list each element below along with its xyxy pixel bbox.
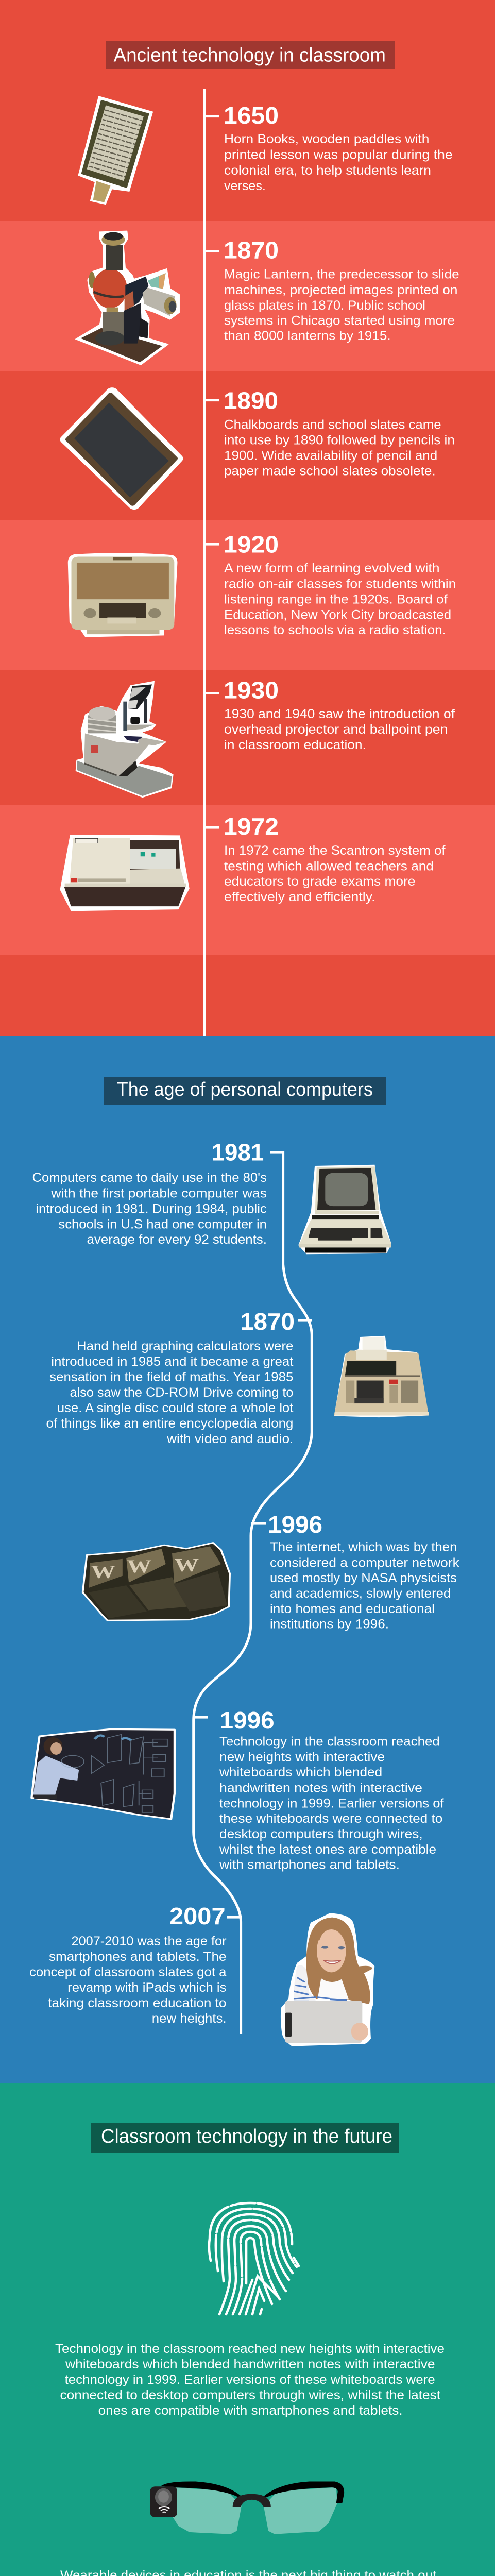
tick bbox=[204, 692, 219, 694]
description bbox=[224, 843, 446, 904]
tick bbox=[195, 1716, 208, 1719]
timeline vertical line bbox=[203, 89, 206, 1036]
icon: www type blocks bbox=[83, 1543, 230, 1620]
description: technology in 1999. Earlier versions of bbox=[219, 1796, 444, 1810]
entry: 1650 bbox=[78, 96, 453, 205]
entry: 1996 internet bbox=[83, 1511, 459, 1632]
description: Education, New York City broadcasted bbox=[224, 607, 451, 622]
description: glass plates in 1870. Public school bbox=[224, 298, 425, 313]
tick bbox=[204, 399, 219, 401]
icon: girl with tablet bbox=[281, 1913, 374, 2046]
description: used mostly by NASA physicists bbox=[270, 1571, 457, 1585]
description: machines, projected images printed on bbox=[224, 283, 457, 297]
description: Chalkboards and school slates came bbox=[224, 417, 441, 432]
heading: future bbox=[91, 2123, 399, 2153]
description: paper made school slates obsolete. bbox=[224, 464, 436, 478]
icon: printing calculator bbox=[334, 1336, 429, 1417]
panel: ancient technology in classroom bbox=[0, 0, 495, 1036]
description: 2007-2010 was the age for bbox=[71, 1934, 227, 1948]
panel: the age of personal computers bbox=[0, 1036, 495, 2083]
description: sensation in the field of maths. Year 1985 bbox=[49, 1370, 293, 1384]
description: 1930 and 1940 saw the introduction of bbox=[224, 707, 455, 721]
icon: vintage computer bbox=[298, 1165, 391, 1254]
entry: 2007 bbox=[29, 1903, 374, 2046]
icon: fingerprint bbox=[209, 2203, 299, 2314]
description: these whiteboards were connected to bbox=[219, 1811, 442, 1826]
entry: 1890 bbox=[65, 387, 455, 505]
text: interactive whiteboards: ones are compatible with smartphones and tablets. bbox=[98, 2403, 403, 2418]
icon: smart glasses bbox=[150, 2481, 344, 2534]
heading: ancient technology: Ancient technology in classroom bbox=[114, 44, 386, 66]
description: Computers came to daily use in the 80's bbox=[32, 1171, 267, 1185]
description: in classroom education. bbox=[224, 738, 366, 752]
description: considered a computer network bbox=[270, 1555, 459, 1570]
text: interactive whiteboards: whiteboards which blended handwritten notes with interactive bbox=[65, 2357, 435, 2371]
description: of things like an entire encyclopedia along bbox=[46, 1416, 293, 1431]
tick bbox=[204, 826, 219, 829]
tick bbox=[204, 115, 219, 117]
year: 1972 bbox=[224, 813, 279, 840]
description: average for every 92 students. bbox=[87, 1232, 267, 1247]
description: Hand held graphing calculators were bbox=[77, 1339, 293, 1353]
text: interactive whiteboards: connected to desktop computers through wires, whilst the latest bbox=[60, 2388, 440, 2402]
icon: www type blocks: W bbox=[91, 1562, 115, 1582]
year: 1930 bbox=[224, 677, 279, 704]
icon: overhead projector bbox=[76, 681, 174, 798]
description: institutions by 1996. bbox=[270, 1617, 389, 1632]
entry: 1996 whiteboards bbox=[31, 1707, 444, 1872]
heading: future: Classroom technology in the future bbox=[101, 2126, 392, 2147]
description bbox=[224, 417, 455, 478]
description: testing which allowed teachers and bbox=[224, 859, 434, 873]
description: verses. bbox=[224, 179, 266, 193]
description: listening range in the 1920s. Board of bbox=[224, 592, 448, 606]
entry: 1920 bbox=[68, 531, 456, 637]
description: desktop computers through wires, bbox=[219, 1827, 423, 1841]
entry: 1981 bbox=[32, 1139, 391, 1254]
description bbox=[46, 1339, 293, 1446]
entry: 1930 bbox=[76, 677, 455, 798]
description bbox=[29, 1934, 227, 2026]
description: also saw the CD-ROM Drive coming to bbox=[70, 1385, 293, 1400]
year: 1870 bbox=[240, 1308, 295, 1335]
description bbox=[32, 1171, 267, 1247]
description: and academics, slowly entered bbox=[270, 1586, 451, 1601]
icon: magic lantern bbox=[76, 231, 179, 365]
year: 1870 bbox=[224, 237, 279, 264]
description: A new form of learning evolved with bbox=[224, 561, 440, 575]
description bbox=[219, 1734, 444, 1872]
icon: teacher at blackboard bbox=[31, 1729, 175, 1819]
tick bbox=[270, 1151, 283, 1154]
description: concept of classroom slates got a bbox=[29, 1965, 227, 1979]
description: handwritten notes with interactive bbox=[219, 1781, 422, 1795]
description bbox=[224, 707, 455, 752]
panel: classroom technology in the future bbox=[0, 2083, 495, 2576]
description: introduced in 1985 and it became a great bbox=[51, 1354, 293, 1369]
description: whilst the latest ones are compatible bbox=[219, 1842, 436, 1857]
description: In 1972 came the Scantron system of bbox=[224, 843, 446, 858]
description: smartphones and tablets. The bbox=[49, 1950, 226, 1964]
description: effectively and efficiently. bbox=[224, 890, 375, 904]
icon: horn book bbox=[78, 96, 153, 205]
description: with video and audio. bbox=[166, 1432, 293, 1446]
description bbox=[224, 132, 453, 193]
year: 2007 bbox=[169, 1903, 226, 1929]
description: lessons to schools via a radio station. bbox=[224, 623, 446, 637]
description bbox=[270, 1540, 459, 1632]
description: overhead projector and ballpoint pen bbox=[224, 722, 448, 737]
description: radio on-air classes for students within bbox=[224, 577, 456, 591]
icon: scantron machine bbox=[60, 835, 190, 911]
description: systems in Chicago started using more bbox=[224, 313, 455, 328]
year: 1996 bbox=[220, 1707, 275, 1734]
year: 1890 bbox=[224, 387, 278, 414]
heading: personal computers: The age of personal computers bbox=[117, 1079, 373, 1100]
description: with the first portable computer was bbox=[50, 1186, 267, 1200]
entry: 1870 calculators bbox=[46, 1308, 429, 1446]
tick bbox=[204, 250, 219, 252]
description: introduced in 1981. During 1984, public bbox=[36, 1201, 267, 1216]
year: 1981 bbox=[212, 1139, 264, 1165]
description: schools in U.S had one computer in bbox=[58, 1217, 267, 1231]
tick bbox=[204, 543, 219, 546]
entry: 1972 bbox=[60, 813, 446, 911]
description: 1900. Wide availability of pencil and bbox=[224, 449, 437, 463]
icon: www type blocks: W bbox=[127, 1556, 151, 1577]
description: new heights. bbox=[152, 2011, 227, 2026]
tick bbox=[251, 1522, 266, 1525]
entry: 1870 bbox=[76, 231, 459, 365]
icon: school slate bbox=[65, 392, 177, 505]
tick bbox=[227, 1916, 241, 1919]
text: interactive whiteboards: technology in 1999. Earlier versions of these whiteboards were bbox=[65, 2372, 435, 2387]
description: into use by 1890 followed by pencils in bbox=[224, 433, 455, 447]
description: The internet, which was by then bbox=[270, 1540, 457, 1554]
description: Technology in the classroom reached bbox=[219, 1734, 440, 1749]
description bbox=[224, 561, 456, 637]
description: revamp with iPads which is bbox=[67, 1980, 226, 1995]
description: educators to grade exams more bbox=[224, 874, 415, 889]
tick bbox=[298, 1319, 312, 1322]
description: Horn Books, wooden paddles with bbox=[224, 132, 429, 146]
description: use. A single disc could store a whole lot bbox=[57, 1401, 293, 1415]
description: with smartphones and tablets. bbox=[219, 1858, 400, 1872]
description: colonial era, to help students learn bbox=[224, 163, 431, 178]
description: Magic Lantern, the predecessor to slide bbox=[224, 267, 459, 281]
description: taking classroom education to bbox=[48, 1996, 226, 2010]
year: 1650 bbox=[224, 102, 279, 129]
icon: vintage radio bbox=[68, 553, 177, 637]
description: printed lesson was popular during the bbox=[224, 147, 453, 162]
description: whiteboards which blended bbox=[219, 1765, 382, 1780]
text: interactive whiteboards bbox=[55, 2342, 445, 2418]
description: into homes and educational bbox=[270, 1602, 435, 1616]
description bbox=[224, 267, 459, 343]
text: interactive whiteboards: Technology in the classroom reached new heights with interactive bbox=[55, 2342, 445, 2356]
icon: www type blocks: W bbox=[174, 1555, 199, 1575]
year: 1996 bbox=[268, 1511, 322, 1538]
description: new heights with interactive bbox=[219, 1750, 385, 1764]
timeline curved line bbox=[194, 1151, 312, 2034]
description: than 8000 lanterns by 1915. bbox=[224, 329, 391, 343]
year: 1920 bbox=[224, 531, 279, 558]
